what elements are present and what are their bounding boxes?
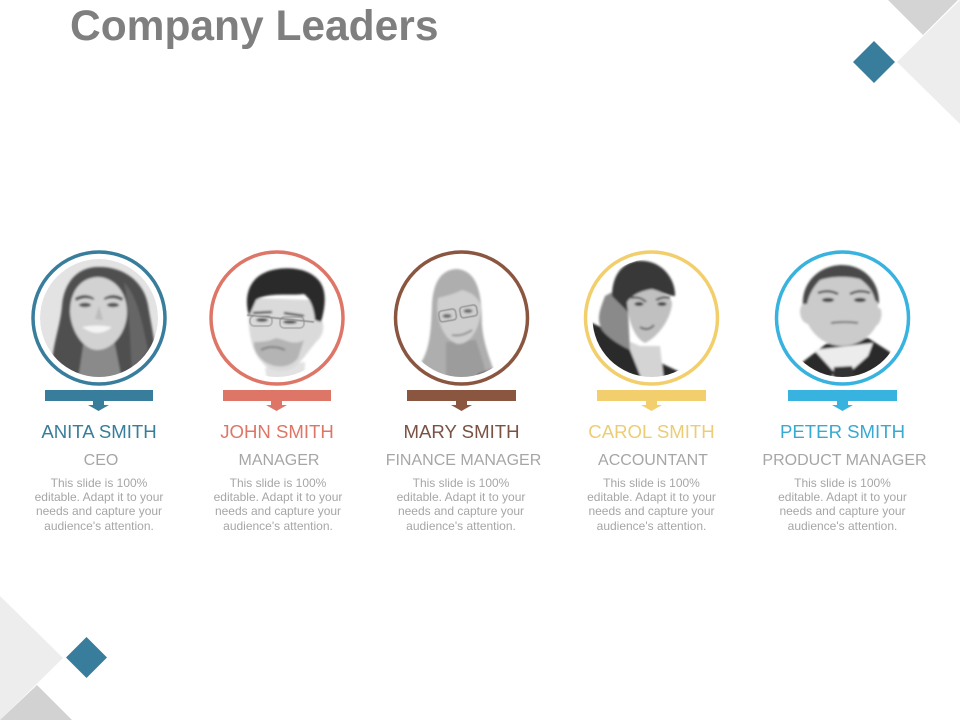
description: editable. Adapt it to your <box>397 490 525 504</box>
description: This slide is 100% <box>51 476 148 490</box>
glasses <box>247 315 314 328</box>
connector bar and arrow <box>407 390 516 411</box>
connector bar and arrow <box>223 390 331 411</box>
portrait: Carol Smith <box>585 252 718 385</box>
glasses <box>438 305 478 322</box>
description: needs and capture your <box>36 504 162 518</box>
role: MANAGER <box>239 452 319 469</box>
description: needs and capture your <box>398 504 524 518</box>
name: JOHN SMITH <box>220 421 334 442</box>
name: MARY SMITH <box>403 421 520 442</box>
description: editable. Adapt it to your <box>587 490 716 504</box>
description: This slide is 100% <box>794 476 891 490</box>
panel: Peter Smith <box>762 252 927 533</box>
description: This slide is 100% <box>413 476 510 490</box>
description: audience's attention. <box>44 519 154 533</box>
panel: Anita Smith <box>33 252 165 533</box>
description: editable. Adapt it to your <box>214 490 342 504</box>
role: FINANCE MANAGER <box>386 452 541 469</box>
description: needs and capture your <box>588 504 715 518</box>
description: editable. Adapt it to your <box>35 490 163 504</box>
description: audience's attention. <box>597 519 706 533</box>
description: needs and capture your <box>779 504 906 518</box>
description: audience's attention. <box>223 519 333 533</box>
description: needs and capture your <box>215 504 341 518</box>
decoration: top right corner shapes <box>853 0 960 124</box>
description: This slide is 100% <box>230 476 327 490</box>
connector bar and arrow <box>597 390 706 411</box>
description: This slide is 100% <box>603 476 700 490</box>
name: PETER SMITH <box>780 421 905 442</box>
role: PRODUCT MANAGER <box>762 452 927 469</box>
role: ACCOUNTANT <box>598 452 708 469</box>
description: audience's attention. <box>788 519 897 533</box>
panel: John Smith <box>211 252 343 533</box>
role: CEO <box>84 452 118 469</box>
description: audience's attention. <box>406 519 516 533</box>
panel: Mary Smith <box>386 252 541 533</box>
decoration: bottom left corner shapes <box>0 596 107 720</box>
portrait: Peter Smith <box>776 252 908 385</box>
connector bar and arrow <box>45 390 153 411</box>
panel: Carol Smith <box>585 252 718 533</box>
portrait: Anita Smith <box>33 252 165 384</box>
portrait: John Smith <box>211 252 343 385</box>
name: CAROL SMITH <box>588 421 715 442</box>
description: editable. Adapt it to your <box>778 490 907 504</box>
name: ANITA SMITH <box>41 421 157 442</box>
connector bar and arrow <box>788 390 897 411</box>
portrait: Mary Smith <box>396 252 528 385</box>
title: Company Leaders <box>70 3 438 50</box>
